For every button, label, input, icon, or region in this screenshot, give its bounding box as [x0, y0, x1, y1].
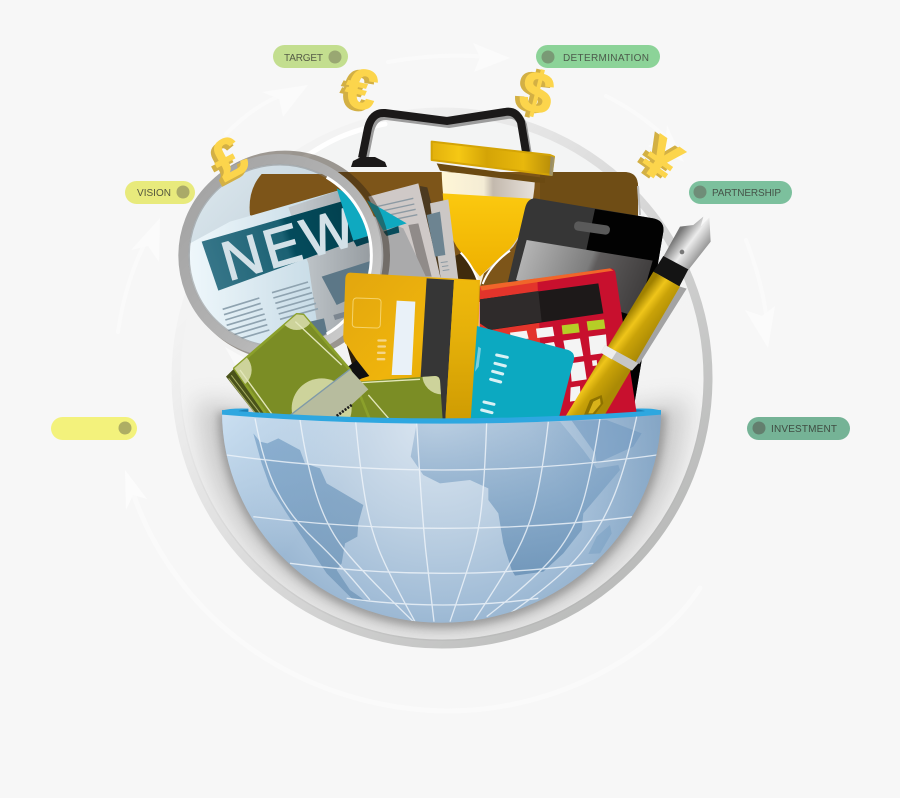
- icon: pound symbol: £: [201, 123, 258, 193]
- label: vision: [125, 181, 195, 204]
- icon: dollar symbol: $: [509, 58, 556, 128]
- magnifying glass over newspaper: [178, 150, 390, 354]
- hourglass: [432, 142, 555, 287]
- label: target: [273, 45, 348, 68]
- icon: pound symbol: £: [198, 126, 255, 197]
- front note: [234, 314, 370, 420]
- label: vision: VISION: [137, 188, 171, 199]
- money banknotes: [226, 313, 442, 418]
- label: determination: [536, 45, 660, 68]
- smartphone: [480, 198, 663, 410]
- fountain pen: [563, 217, 711, 420]
- note stack edge: [226, 368, 270, 420]
- background circle ring: [176, 112, 708, 644]
- continent: arabia: [572, 420, 642, 463]
- globe bowl: [222, 410, 661, 623]
- label: investment: INVESTMENT: [771, 424, 837, 435]
- newspaper back sheets: [367, 183, 458, 280]
- bowl shadow on ring: [198, 400, 686, 635]
- icon: yen symbol: ¥: [625, 123, 689, 195]
- grid lines: [227, 417, 657, 622]
- back note: [357, 376, 443, 420]
- continent: madagascar: [588, 525, 612, 554]
- continent: africa: [411, 422, 620, 576]
- white signature strip: [392, 301, 415, 375]
- calculator: [478, 268, 637, 420]
- icon: dollar symbol: $: [514, 58, 561, 128]
- gold side band: [445, 280, 478, 420]
- rim: [222, 410, 661, 424]
- circular cycle arrows: [118, 43, 775, 711]
- label: blank yellow pill: [51, 417, 137, 440]
- teal card: [471, 326, 574, 420]
- icon: euro symbol: €: [340, 55, 383, 123]
- lens view: NEW: [215, 195, 365, 293]
- lens rim: [183, 159, 377, 352]
- label: target: TARGET: [284, 53, 323, 64]
- white paper under lens: [225, 347, 262, 377]
- briefcase: [250, 112, 640, 302]
- label: partnership: [689, 181, 792, 204]
- gold credit card: [343, 273, 480, 420]
- icon: yen symbol: ¥: [629, 124, 693, 195]
- lens view: [188, 164, 370, 344]
- label: determination: DETERMINATION: [563, 53, 649, 64]
- continent: south america: [254, 434, 366, 602]
- ring white highlight: [297, 124, 385, 163]
- label: investment: [747, 417, 850, 440]
- black band: [337, 360, 369, 383]
- icon: euro symbol: €: [335, 56, 379, 124]
- globe bowl back rim: [222, 409, 661, 420]
- magnetic stripe: [418, 278, 454, 420]
- paper strap: [288, 369, 368, 418]
- label: partnership: PARTNERSHIP: [712, 188, 781, 199]
